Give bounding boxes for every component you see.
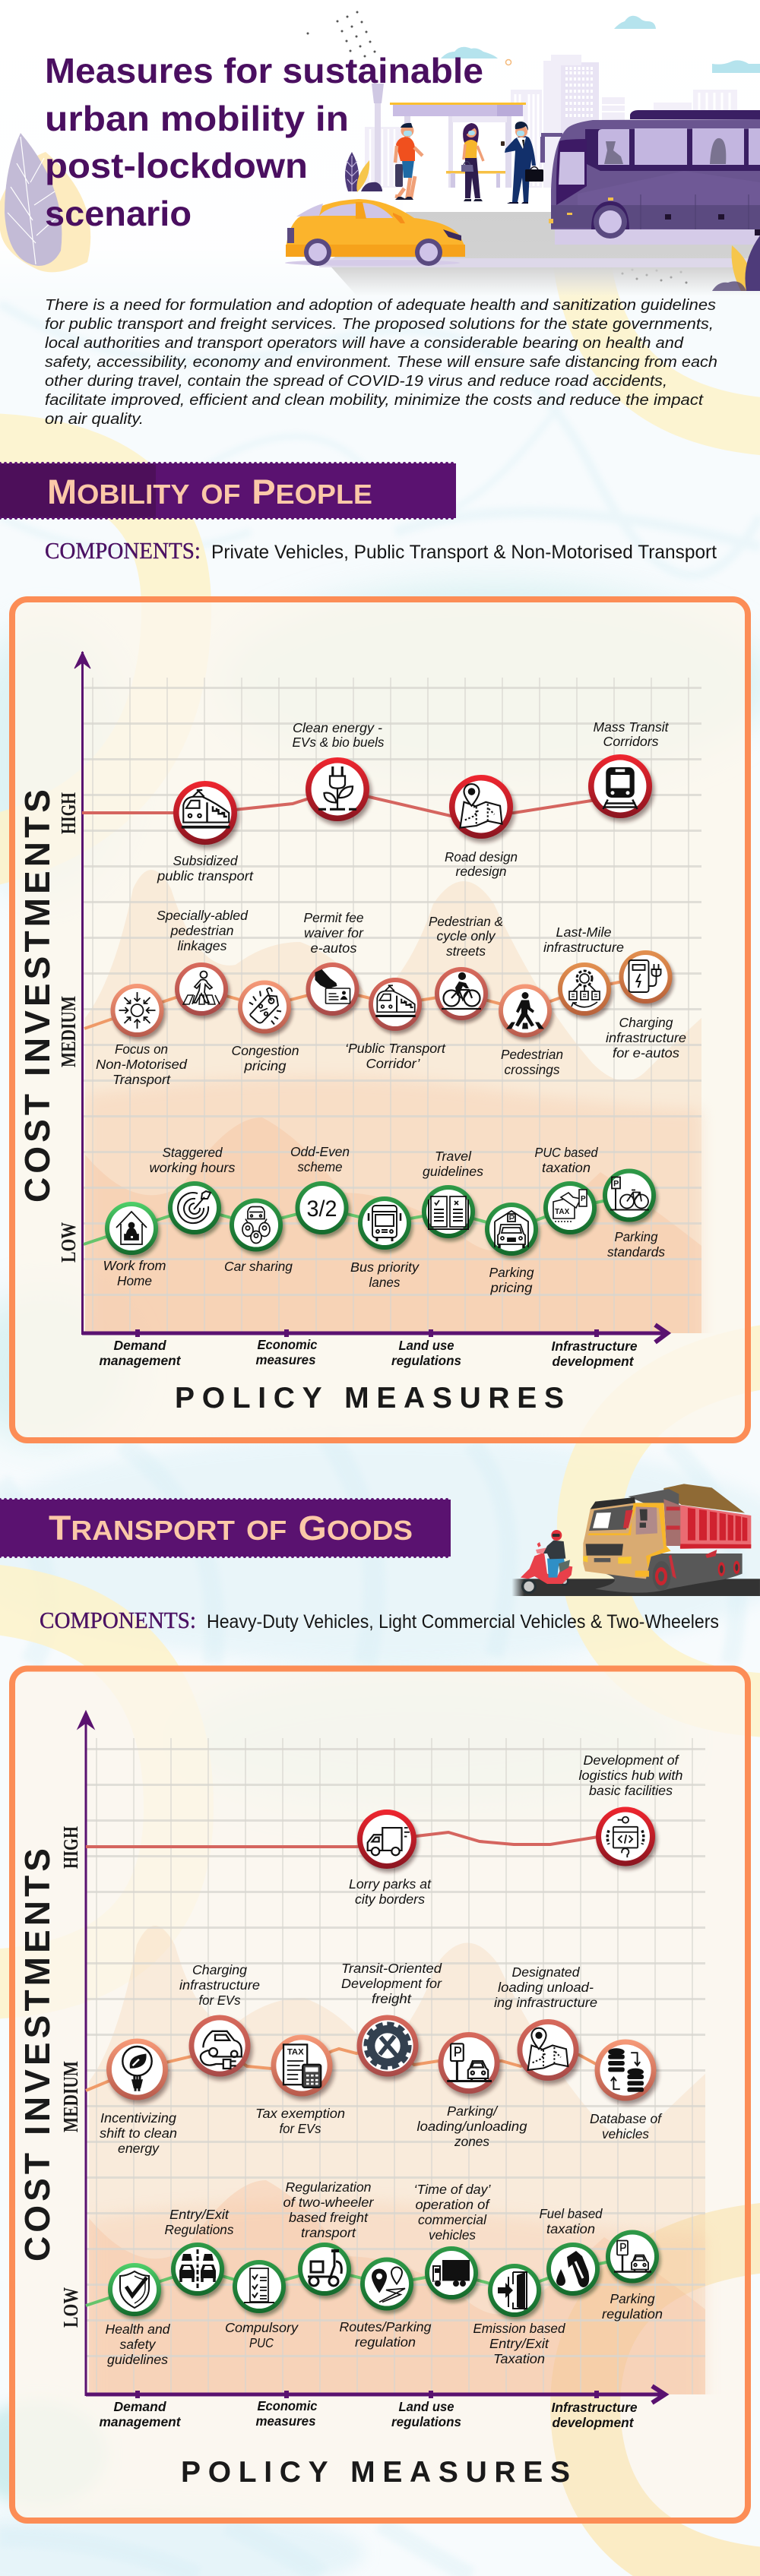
label: database: vehicles	[602, 2126, 649, 2141]
label: clean energy	[292, 720, 385, 750]
right corner plants	[712, 235, 760, 291]
node: compulsory PUC	[233, 2260, 287, 2316]
x axis categories: Demand	[114, 1338, 166, 1353]
intro text: for public transport and freight services. The proposed solutions for the state governments,	[45, 315, 714, 333]
label: car sharing: Car sharing	[224, 1259, 293, 1274]
yellow car	[285, 199, 465, 266]
label: congestion pricing: Congestion	[231, 1043, 299, 1058]
label: parking regulation: regulation	[602, 2306, 663, 2322]
node: parking regulation	[606, 2230, 660, 2287]
label: logistics hub: basic facilities	[589, 1783, 673, 1798]
panel: mobility of people chart	[12, 599, 748, 1440]
x axis categories: Land use	[398, 1338, 454, 1353]
label: time of day: vehicles	[429, 2227, 476, 2243]
label: travel guidelines: guidelines	[423, 1164, 483, 1179]
axes with arrows	[74, 652, 667, 1342]
y axis title: COST INVESTMENTS	[17, 1848, 57, 2262]
person: woman in yellow top	[461, 123, 483, 201]
buildings	[365, 55, 737, 191]
intro text: There is a need for formulation and adoption of adequate health and sanitization guidelines	[45, 296, 716, 314]
label: incentivizing: shift to clean	[100, 2126, 177, 2141]
label: logistics hub: Development of	[584, 1753, 680, 1768]
label: designated loading: Designated	[512, 1964, 581, 1980]
label: pedestrian crossings: Pedestrian	[501, 1047, 563, 1062]
section heading: Mobility of People: Mobility of People	[47, 469, 372, 512]
node: parking loading zones	[438, 2032, 502, 2097]
header illustration: city, bus stop, people, car and bus	[285, 11, 760, 296]
x axis categories: regulations	[391, 2414, 461, 2429]
section heading: Transport of Goods: Transport of Goods	[49, 1505, 413, 1548]
label: transit-oriented	[341, 1961, 442, 2006]
label: parking standards: Parking	[614, 1229, 658, 1244]
label: charging e-autos: Charging	[619, 1015, 673, 1030]
label: emission	[473, 2321, 566, 2366]
trend line: medium	[86, 2046, 625, 2091]
node: subsidized public transport	[173, 781, 239, 849]
label: designated loading: loading unload-	[498, 1980, 594, 1995]
panel: transport of goods chart	[12, 1668, 760, 2576]
y axis level: low: LOW	[57, 1222, 80, 1263]
label: permit fee	[304, 910, 364, 956]
label: charging for EVs: infrastructure	[179, 1977, 260, 1993]
x axis categories: Economic	[257, 2398, 318, 2413]
label: parking pricing	[489, 1265, 534, 1295]
y axis level: medium: MEDIUM	[57, 996, 80, 1067]
label: mass transit: Mass Transit	[593, 719, 670, 735]
y axis level: medium: MEDIUM	[59, 2061, 82, 2132]
label: time of day: operation of	[415, 2197, 491, 2212]
label: clean energy: EVs & bio buels	[292, 735, 385, 750]
node: routes/parking	[360, 2258, 415, 2314]
label: transit-oriented: freight	[372, 1991, 412, 2006]
x axis title: POLICY MEASURES	[175, 1382, 564, 1414]
label: emission: Emission based	[473, 2321, 566, 2336]
label: entry/exit	[164, 2207, 234, 2237]
label: regularization: transport	[301, 2225, 356, 2240]
node: charging for e-autos	[619, 950, 674, 1007]
x axis categories: development	[552, 1354, 635, 1369]
components line: people	[45, 537, 717, 564]
label: bus priority: Bus priority	[350, 1260, 420, 1275]
label: health and safety: Health and	[105, 2322, 171, 2337]
label: entry/exit: Entry/Exit	[169, 2207, 230, 2222]
node: road design	[449, 775, 515, 842]
decorative yellow arc inside panel	[585, 2237, 760, 2576]
label: odd-even: scheme	[298, 1159, 343, 1174]
label: pedestrian and cycle	[429, 914, 503, 959]
label: mass transit: Corridors	[603, 734, 659, 749]
label: regularization	[283, 2179, 375, 2240]
label: database	[590, 2111, 663, 2141]
label: work from home: Home	[117, 1273, 152, 1288]
label: permit fee: e-autos	[310, 940, 357, 956]
node: public transport corridor	[369, 978, 423, 1034]
label: compulsory PUC: Compulsory	[225, 2320, 299, 2335]
node: mass transit	[588, 754, 654, 822]
intro text: facilitate improved, efficient and clean mobility, minimize the costs and reduce the impact	[45, 391, 704, 409]
axes with arrows	[78, 1711, 665, 2403]
road	[327, 212, 760, 296]
label: work from home: Work from	[103, 1258, 166, 1273]
label: focus on NMT: Focus on	[115, 1041, 168, 1057]
node: lorry parks	[357, 1810, 419, 1873]
y axis level: high: HIGH	[57, 792, 80, 834]
label: parking loading zones	[416, 2103, 527, 2149]
label: emission: Entry/Exit	[489, 2336, 549, 2351]
label: last-mile	[543, 925, 624, 955]
label: database: Database of	[590, 2111, 663, 2126]
label: transit-oriented: Transit-Oriented	[341, 1961, 442, 1976]
label: health and safety: safety	[120, 2337, 157, 2352]
label: congestion pricing: pricing	[243, 1058, 287, 1073]
label: specially-abled: linkages	[178, 938, 227, 953]
label: emission: Taxation	[493, 2351, 545, 2366]
label: regularization: of two-wheeler	[283, 2195, 375, 2210]
node: two-wheeler freight	[298, 2243, 353, 2299]
label: routes/parking: regulation	[355, 2334, 416, 2350]
label: staggered	[149, 1145, 236, 1175]
label: congestion pricing	[231, 1043, 299, 1073]
node: specially-abled pedestrian linkages	[175, 962, 230, 1019]
label: bus priority	[350, 1260, 420, 1290]
intro text: on air quality.	[45, 410, 144, 428]
label: pedestrian and cycle: cycle only	[436, 928, 496, 943]
components line: people: Private Vehicles, Public Transport & Non-Motorised Transport	[211, 542, 717, 563]
node: PUC based taxation	[543, 1181, 598, 1237]
label: charging e-autos: infrastructure	[606, 1030, 686, 1045]
label: lorry parks: Lorry parks at	[349, 1876, 432, 1892]
title: Measures for sustainable	[45, 51, 483, 90]
small plants	[345, 152, 382, 192]
components line: goods	[40, 1607, 719, 1633]
label: time of day	[413, 2182, 492, 2243]
label: fuel based: Fuel based	[540, 2206, 603, 2221]
label: parking regulation	[602, 2291, 663, 2322]
label: parking pricing: pricing	[489, 1280, 533, 1295]
label: road design: redesign	[456, 864, 506, 879]
node: database of vehicles	[594, 2039, 658, 2104]
label: focus on NMT: Transport	[112, 1072, 171, 1087]
label: routes/parking: Routes/Parking	[339, 2319, 432, 2334]
section heading: Transport of Goods	[0, 1500, 451, 1557]
label: routes/parking	[339, 2319, 432, 2350]
node: parking standards	[603, 1168, 657, 1225]
label: parking regulation: Parking	[610, 2291, 655, 2306]
node: transit-oriented development	[357, 2015, 420, 2080]
label: odd-even: Odd-Even	[290, 1144, 350, 1159]
label: charging for EVs: Charging	[192, 1962, 247, 1977]
label: regularization: based freight	[289, 2210, 369, 2225]
node: bus priority lanes	[358, 1196, 413, 1253]
truck and scooter illustration	[511, 1484, 760, 1596]
y axis title: COST INVESTMENTS	[17, 789, 57, 1203]
label: mass transit	[593, 719, 670, 749]
label: parking loading zones: zones	[454, 2134, 489, 2149]
node: focus on NMT	[111, 984, 166, 1040]
label: charging e-autos: for e-autos	[613, 1045, 679, 1060]
label: PUC taxation: taxation	[542, 1160, 591, 1175]
label: parking standards: standards	[607, 1244, 665, 1260]
trend line: high	[86, 1832, 598, 1847]
node: emission based entry	[488, 2264, 543, 2320]
label: incentivizing: Incentivizing	[100, 2110, 176, 2126]
node: car sharing	[230, 1199, 284, 1255]
trend line: medium	[84, 977, 645, 1029]
node: odd-even scheme: 3/2	[307, 1196, 337, 1222]
label: odd-even	[290, 1144, 350, 1174]
chart grid	[82, 678, 701, 1333]
label: time of day: commercial	[418, 2212, 487, 2227]
intro text: other during travel, contain the spread of COVID-19 virus and reduce road accidents,	[45, 372, 667, 390]
label: logistics hub	[579, 1753, 682, 1798]
node: clean energy	[306, 757, 372, 825]
components line: goods: COMPONENTS:	[40, 1607, 196, 1633]
x axis categories: management	[99, 2414, 182, 2429]
label: subsidized: public transport	[157, 868, 254, 883]
label: time of day: ‘Time of day’	[413, 2182, 492, 2197]
intro text: safety, accessibility, economy and environment. These will ensure safe distancing from each	[45, 353, 717, 371]
section heading: Mobility of People	[0, 463, 456, 518]
label: public transport corridor: ‘Public Transport	[345, 1041, 446, 1056]
label: pedestrian and cycle: Pedestrian &	[429, 914, 503, 929]
label: specially-abled: Specially-abled	[157, 908, 249, 923]
label: fuel based: taxation	[546, 2221, 595, 2236]
label: travel guidelines: Travel	[435, 1149, 472, 1164]
label: entry/exit: Regulations	[164, 2222, 234, 2237]
x axis categories	[99, 2398, 638, 2430]
label: specially-abled	[157, 908, 249, 953]
label: staggered: working hours	[149, 1160, 236, 1175]
components line: goods: Heavy-Duty Vehicles, Light Commercial Vehicles & Two-Wheelers	[207, 1611, 719, 1633]
x axis categories	[99, 1337, 638, 1369]
trend line: low	[84, 1196, 629, 1244]
title: scenario	[45, 194, 192, 233]
label: subsidized: Subsidized	[173, 853, 239, 868]
label: designated loading	[494, 1964, 597, 2010]
label: designated loading: ing infrastructure	[494, 1995, 597, 2010]
label: parking loading zones: loading/unloading	[416, 2119, 527, 2134]
label: charging e-autos	[606, 1015, 686, 1060]
label: staggered: Staggered	[163, 1145, 223, 1160]
intro text	[45, 296, 717, 428]
label: travel guidelines	[423, 1149, 483, 1179]
label: public transport corridor: Corridor’	[366, 1056, 421, 1071]
label: incentivizing: energy	[118, 2141, 160, 2156]
label: lorry parks	[349, 1876, 432, 1907]
title	[45, 51, 483, 233]
label: compulsory PUC: PUC	[249, 2335, 274, 2350]
trend line: high	[82, 789, 620, 816]
person: man in orange shirt	[395, 123, 423, 200]
components line: people: COMPONENTS:	[45, 537, 201, 564]
x axis categories: measures	[255, 2413, 316, 2429]
label: lorry parks: city borders	[355, 1892, 425, 1907]
x axis categories: management	[99, 1353, 182, 1368]
label: pedestrian and cycle: streets	[446, 943, 486, 959]
label: road design	[445, 849, 518, 879]
label: health and safety: guidelines	[107, 2352, 168, 2367]
label: focus on NMT: Non-Motorised	[96, 1057, 188, 1072]
node: travel guidelines	[422, 1185, 477, 1241]
label: regularization: Regularization	[286, 2179, 371, 2195]
street lamp	[372, 84, 384, 188]
x axis categories: Demand	[114, 2399, 166, 2414]
label: compulsory PUC	[225, 2320, 299, 2350]
mountains backdrop	[89, 1926, 705, 2431]
mountains backdrop	[85, 870, 701, 1367]
y axis level: low: LOW	[59, 2287, 82, 2328]
node: charging for EVs	[188, 2015, 252, 2080]
label: focus on NMT	[96, 1041, 188, 1087]
label: transit-oriented: Development for	[341, 1976, 442, 1991]
label: permit fee: waiver for	[304, 925, 364, 940]
label: subsidized	[157, 853, 254, 883]
label: last-mile: infrastructure	[543, 940, 624, 955]
node: work from home	[105, 1202, 160, 1258]
label: PUC taxation	[535, 1145, 599, 1175]
label: public transport corridor	[345, 1041, 446, 1071]
label: parking standards	[607, 1229, 665, 1260]
node: permit fee waiver	[306, 962, 361, 1019]
node: staggered hours	[168, 1181, 223, 1237]
label: bus priority: lanes	[369, 1275, 401, 1290]
node: pedestrian and cycle streets	[435, 967, 489, 1023]
node: fuel based taxation	[546, 2243, 601, 2299]
label: PUC taxation: PUC based	[535, 1145, 599, 1160]
label: charging for EVs	[179, 1962, 260, 2008]
label: work from home	[103, 1258, 166, 1288]
chart grid	[86, 1738, 705, 2394]
node: designated loading	[517, 2019, 581, 2085]
label: clean energy: Clean energy -	[293, 720, 382, 735]
node: incentivizing clean energy	[106, 2039, 170, 2103]
x axis categories: development	[552, 2415, 635, 2430]
person: man in suit with briefcase	[501, 122, 543, 204]
node: last-mile infrastructure	[558, 962, 613, 1019]
icon: decorative clouds and dots	[307, 11, 760, 284]
node: parking pricing	[485, 1203, 540, 1259]
label: road design: Road design	[445, 849, 518, 864]
title: urban mobility in	[45, 99, 349, 138]
x axis categories: regulations	[391, 1353, 461, 1368]
x axis categories: measures	[255, 1352, 316, 1367]
label: permit fee: Permit fee	[304, 910, 364, 925]
node: entry/exit regulations	[171, 2243, 226, 2299]
label: tax exemption	[255, 2106, 345, 2136]
label: pedestrian crossings	[501, 1047, 563, 1077]
label: pedestrian crossings: crossings	[505, 1062, 560, 1077]
label: logistics hub: logistics hub with	[579, 1768, 682, 1783]
bus shelter	[390, 103, 526, 188]
x axis categories: Infrastructure	[552, 2400, 638, 2415]
title: post-lockdown	[45, 146, 308, 185]
node: time of day	[425, 2246, 480, 2303]
node: tax exemption	[271, 2034, 334, 2100]
scooter and rider	[521, 1530, 572, 1594]
icon: large left leaves	[0, 133, 90, 272]
x axis title: POLICY MEASURES	[181, 2456, 570, 2489]
x axis categories: Infrastructure	[552, 1339, 638, 1354]
intro text: local authorities and transport operators will have a considerable bearing on health and	[45, 334, 684, 352]
node: congestion pricing	[238, 980, 293, 1037]
trend line: low	[86, 2257, 632, 2306]
node: health and safety	[108, 2263, 163, 2319]
label: tax exemption: Tax exemption	[255, 2106, 345, 2121]
x axis categories: Land use	[398, 2399, 454, 2414]
node: logistics hub	[596, 1806, 657, 1870]
label: health and safety	[105, 2322, 171, 2367]
label: fuel based	[540, 2206, 603, 2236]
bus	[540, 110, 760, 239]
label: charging for EVs: for EVs	[199, 1993, 241, 2008]
y axis level: high: HIGH	[59, 1826, 82, 1869]
label: tax exemption: for EVs	[280, 2121, 321, 2136]
label: parking loading zones: Parking/	[447, 2103, 499, 2119]
label: last-mile: Last-Mile	[556, 925, 612, 940]
node: odd-even scheme	[295, 1181, 350, 1237]
x axis categories: Economic	[257, 1337, 318, 1352]
label: parking pricing: Parking	[489, 1265, 534, 1280]
label: incentivizing	[100, 2110, 177, 2156]
label: specially-abled: pedestrian	[169, 923, 234, 938]
node: pedestrian crossings	[499, 985, 553, 1041]
